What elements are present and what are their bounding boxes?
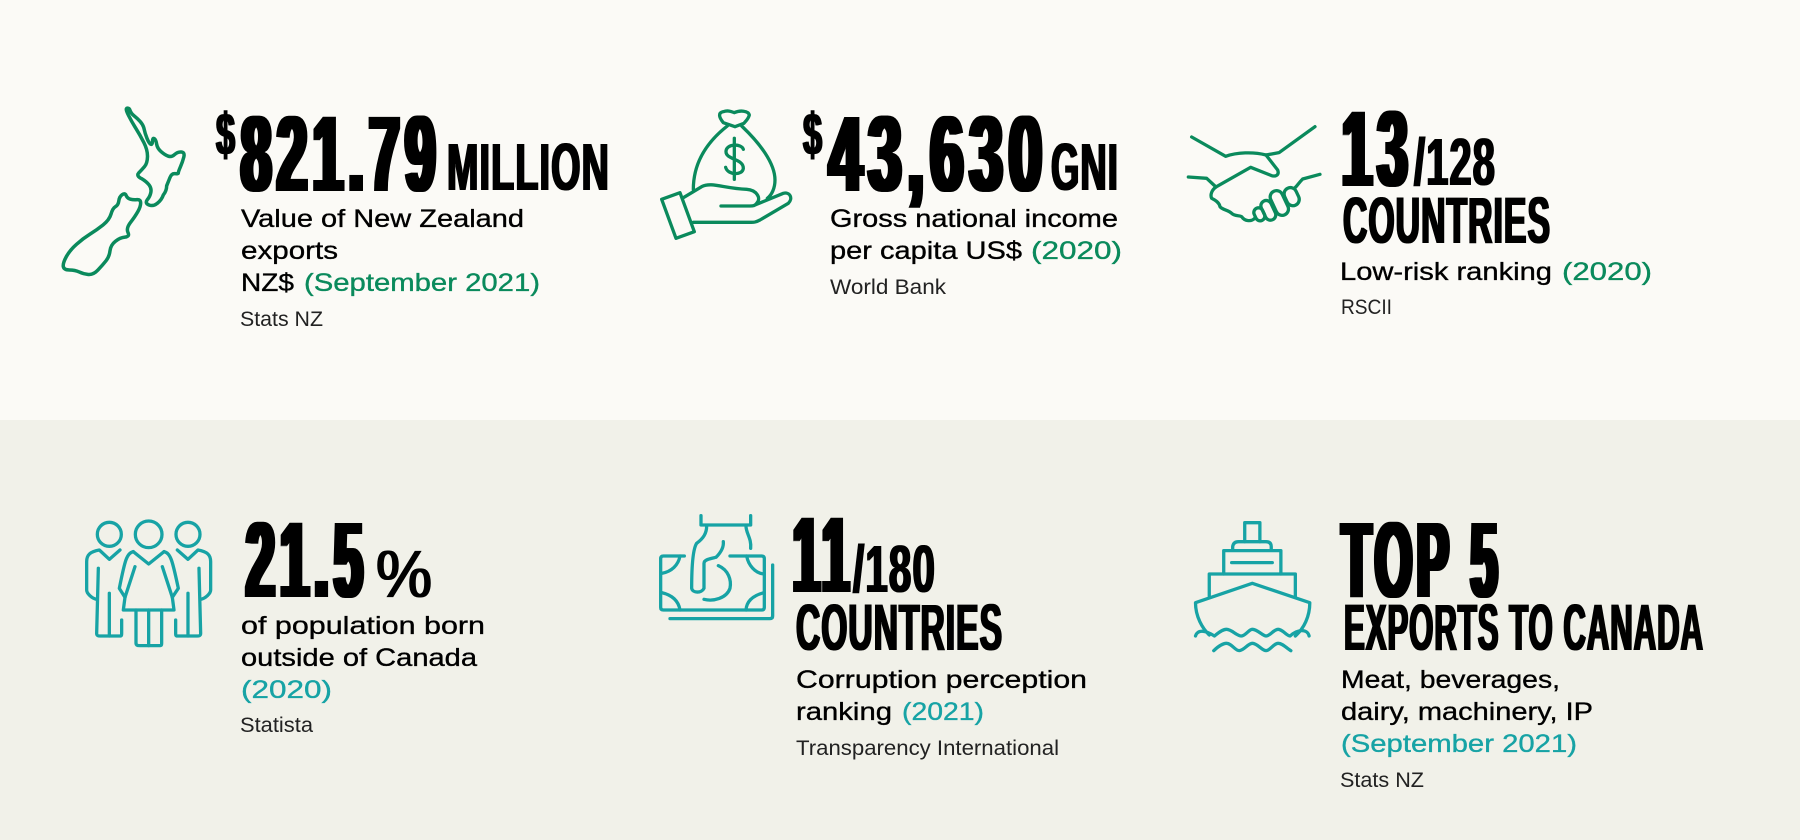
description (1341, 666, 1593, 758)
description: Meat, beverages, (1341, 666, 1560, 694)
bottom background band (0, 420, 1800, 840)
description (241, 205, 540, 297)
value: 11/180 countries: /180 (853, 532, 936, 607)
description: (2020) (1031, 237, 1122, 265)
description (796, 666, 1087, 726)
panel: population born outside Canada (87, 499, 485, 737)
description: (September 2021) (304, 269, 540, 297)
value: 21.5%: 21.5 (246, 499, 368, 620)
description: per capita US$ (830, 237, 1022, 265)
value: $43,630 GNI: GNI (1051, 130, 1119, 205)
source: Transparency International (796, 737, 1059, 760)
description: exports (241, 237, 338, 265)
description: (September 2021) (1341, 730, 1577, 758)
top background band (0, 0, 1800, 420)
icon: money bag on hand (662, 111, 791, 238)
description: Gross national income (830, 205, 1118, 233)
source: World Bank (830, 276, 947, 299)
panel: NZ exports value (63, 93, 610, 331)
panel: corruption perception ranking (661, 494, 1087, 760)
icon: ship on waves (1195, 523, 1310, 651)
icon: three people (87, 521, 211, 646)
source: Statista (240, 714, 313, 737)
description: (2020) (241, 676, 332, 704)
source: Stats NZ (240, 308, 323, 331)
description: (2020) (1562, 258, 1652, 286)
value: 13/128 countries: 13 (1342, 88, 1413, 209)
value: 13/128 countries: /128 (1414, 125, 1496, 200)
description: ranking (796, 698, 892, 726)
description: NZ$ (241, 269, 294, 297)
value: $821.79 million: MILLION (447, 130, 610, 205)
icon: hand with banknote (661, 516, 773, 619)
panel: top exports to Canada (1195, 499, 1704, 792)
value: 13/128 countries (1342, 88, 1551, 257)
source: Stats NZ (1340, 769, 1424, 792)
description (830, 205, 1122, 265)
icon: handshake (1188, 127, 1320, 222)
value: 11/180 countries (793, 494, 1003, 664)
value: $43,630 GNI: $ (803, 101, 822, 168)
value: 11/180 countries: 11 (793, 494, 854, 615)
description: of population born (241, 612, 485, 640)
value: top 5 exports to Canada: TOP 5 (1342, 499, 1502, 620)
icon: New Zealand map (63, 108, 184, 275)
description: outside of Canada (241, 644, 477, 672)
description: Low-risk ranking (1340, 258, 1552, 286)
description: Value of New Zealand (241, 205, 524, 233)
value: $821.79 million: 821.79 (241, 93, 441, 214)
description (1340, 258, 1652, 286)
value: 11/180 countries: COUNTRIES (796, 590, 1003, 664)
description: dairy, machinery, IP (1341, 698, 1593, 726)
description (241, 612, 485, 704)
description: Corruption perception (796, 666, 1087, 694)
panel: GNI per capita (662, 93, 1122, 299)
description: (2021) (902, 698, 984, 726)
source: RSCII (1341, 296, 1392, 319)
value: 21.5%: % (376, 537, 432, 612)
panel: low-risk ranking (1188, 88, 1652, 319)
value: $43,630 GNI: 43,630 (829, 93, 1048, 214)
value: 13/128 countries: COUNTRIES (1343, 183, 1551, 257)
value: $43,630 GNI (803, 93, 1119, 214)
value: $821.79 million: $ (216, 101, 235, 168)
